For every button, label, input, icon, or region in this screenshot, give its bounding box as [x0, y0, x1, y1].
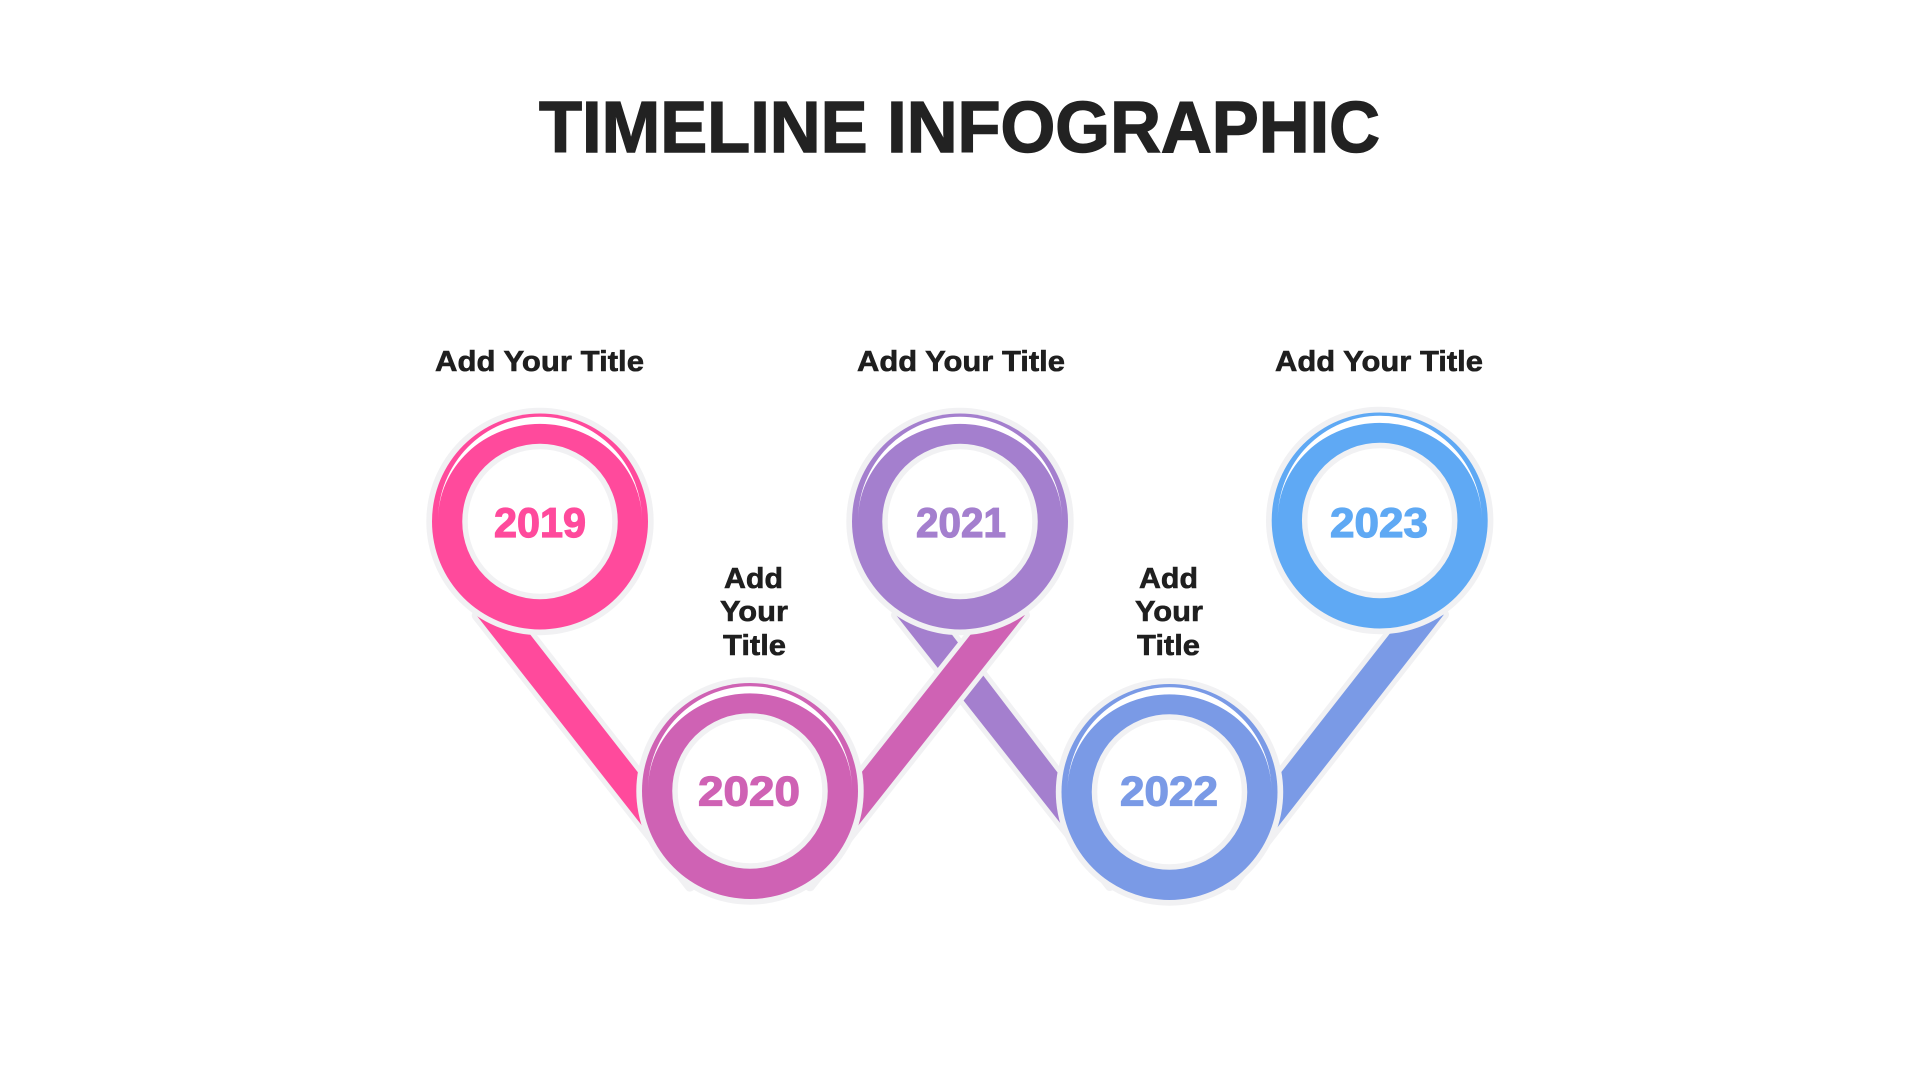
year: 2020: 2020: [698, 768, 800, 814]
milestone ring: 2021: [846, 408, 1074, 635]
label: 2020 title: [720, 563, 788, 662]
connector: 2022 to 2023: [1232, 614, 1444, 886]
year: 2021: 2021: [916, 499, 1006, 546]
connector: 2020 to 2021: [810, 615, 1025, 886]
connector: 2019 to 2020: [477, 616, 690, 887]
label: 2022 title: [1135, 563, 1203, 662]
label: 2020 title: Your: [720, 596, 788, 628]
milestone ring: 2019: [426, 408, 654, 635]
label: 2019 title: Add Your Title: [435, 346, 644, 378]
milestone ring: 2020: [636, 677, 864, 905]
milestone ring: 2022: [1056, 678, 1283, 906]
milestone ring: 2023: [1266, 407, 1493, 634]
year: 2023: 2023: [1330, 499, 1428, 546]
label: 2022 title: Your: [1135, 596, 1203, 628]
label: 2021 title: Add Your Title: [857, 346, 1065, 378]
label: 2023 title: Add Your Title: [1275, 346, 1483, 378]
title: TIMELINE INFOGRAPHIC: [539, 88, 1380, 168]
connector: 2021 to 2022: [896, 615, 1110, 886]
label: 2020 title: Title: [723, 630, 786, 662]
label: 2020 title: Add: [724, 563, 783, 595]
year: 2019: 2019: [494, 499, 586, 546]
label: 2022 title: Title: [1137, 630, 1200, 662]
year: 2022: 2022: [1120, 768, 1218, 814]
label: 2022 title: Add: [1139, 563, 1198, 595]
